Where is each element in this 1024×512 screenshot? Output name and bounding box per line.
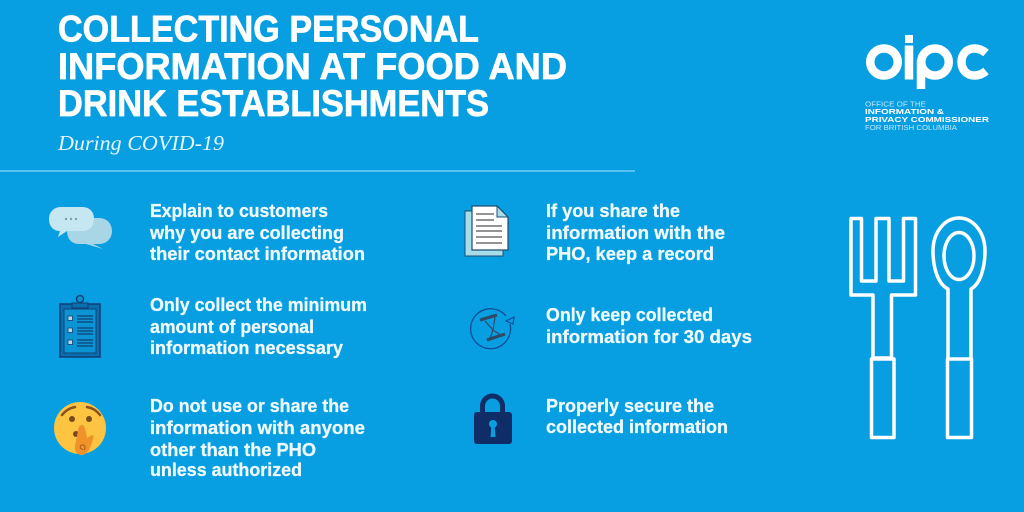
instruction: keep a record (546, 200, 725, 264)
title: DRINK ESTABLISHMENTS (58, 83, 489, 124)
instruction: explain to customers: their contact information (150, 243, 365, 264)
icon: padlock (474, 396, 512, 444)
title: COLLECTING PERSONAL (58, 8, 479, 50)
instruction: collect the minimum: Only collect the minimum (150, 294, 367, 315)
instruction: secure the information: Properly secure the (546, 395, 714, 416)
instruction: do not use or share (150, 395, 365, 480)
icon: shushing face (54, 402, 106, 455)
instruction: do not use or share: information with anyone (150, 417, 365, 438)
instruction: keep a record: PHO, keep a record (546, 243, 714, 264)
instruction: keep for 30 days: Only keep collected (546, 304, 713, 325)
instruction: do not use or share: Do not use or share the (150, 395, 349, 416)
instruction: collect the minimum: information necessary (150, 337, 344, 358)
instruction: secure the information (546, 395, 728, 437)
instruction: collect the minimum (150, 294, 367, 358)
logo caption (865, 102, 990, 132)
icon: spoon (933, 218, 985, 438)
icon: fork (851, 218, 916, 438)
logo: OIPC (865, 35, 990, 132)
instruction: keep for 30 days: information for 30 days (546, 326, 752, 347)
instruction: collect the minimum: amount of personal (150, 316, 314, 337)
subtitle: During COVID-19 (57, 131, 225, 155)
icon: hourglass timer (471, 309, 514, 349)
icon: fork and spoon (851, 218, 985, 438)
logo caption: OFFICE OF THE (865, 102, 926, 108)
instruction: keep a record: If you share the (546, 200, 680, 221)
icon: document (465, 206, 508, 256)
instruction: explain to customers: why you are collecting (149, 222, 344, 243)
title: INFORMATION AT FOOD AND (58, 46, 567, 87)
logo caption: INFORMATION & (865, 107, 945, 116)
logo caption: FOR BRITISH COLUMBIA (865, 125, 957, 132)
instruction: secure the information: collected information (546, 416, 728, 437)
icon: clipboard (60, 296, 100, 357)
logo wordmark (870, 46, 986, 89)
instruction: do not use or share: other than the PHO (150, 439, 316, 460)
instruction: keep a record: information with the (546, 222, 725, 243)
logo caption: PRIVACY COMMISSIONER (865, 115, 990, 124)
instruction: keep for 30 days (546, 304, 752, 347)
instruction: do not use or share: unless authorized (150, 459, 302, 480)
instruction: explain to customers: Explain to customers (150, 200, 328, 221)
title (58, 8, 567, 124)
instruction: explain to customers (149, 200, 365, 264)
icon: speech bubbles (49, 207, 112, 249)
